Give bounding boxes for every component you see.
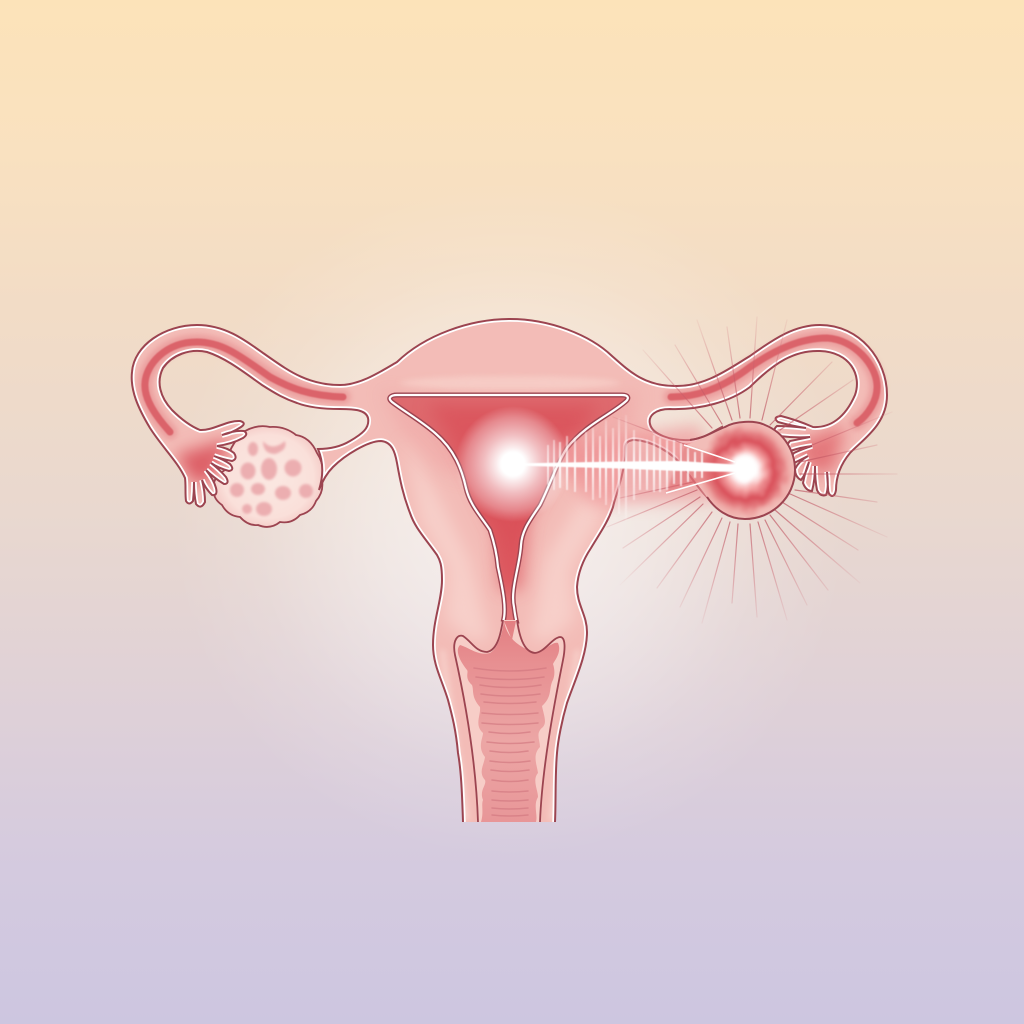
fornix outline <box>454 620 565 822</box>
left tube lumen <box>145 342 343 432</box>
radiating lines around right ovary <box>607 317 897 623</box>
silhouette outline <box>132 319 887 822</box>
rugae folds <box>474 668 546 816</box>
uterus, tubes and vaginal wall silhouette <box>132 319 887 822</box>
pink haze around beam <box>545 425 720 505</box>
right tube lumen <box>671 338 877 423</box>
vaginal canal with rugae <box>454 620 565 822</box>
wall shading <box>175 376 845 820</box>
left ovary with follicles <box>214 426 323 527</box>
cone of light from ovary <box>666 445 735 493</box>
white light beam <box>512 461 742 472</box>
vertical spikes along beam <box>548 415 702 520</box>
ovary light core <box>731 454 759 482</box>
cavity light core <box>502 453 524 475</box>
uterine cavity and cervical canal <box>390 395 628 640</box>
glow in uterine cavity <box>455 406 571 522</box>
right ovary <box>683 422 795 519</box>
